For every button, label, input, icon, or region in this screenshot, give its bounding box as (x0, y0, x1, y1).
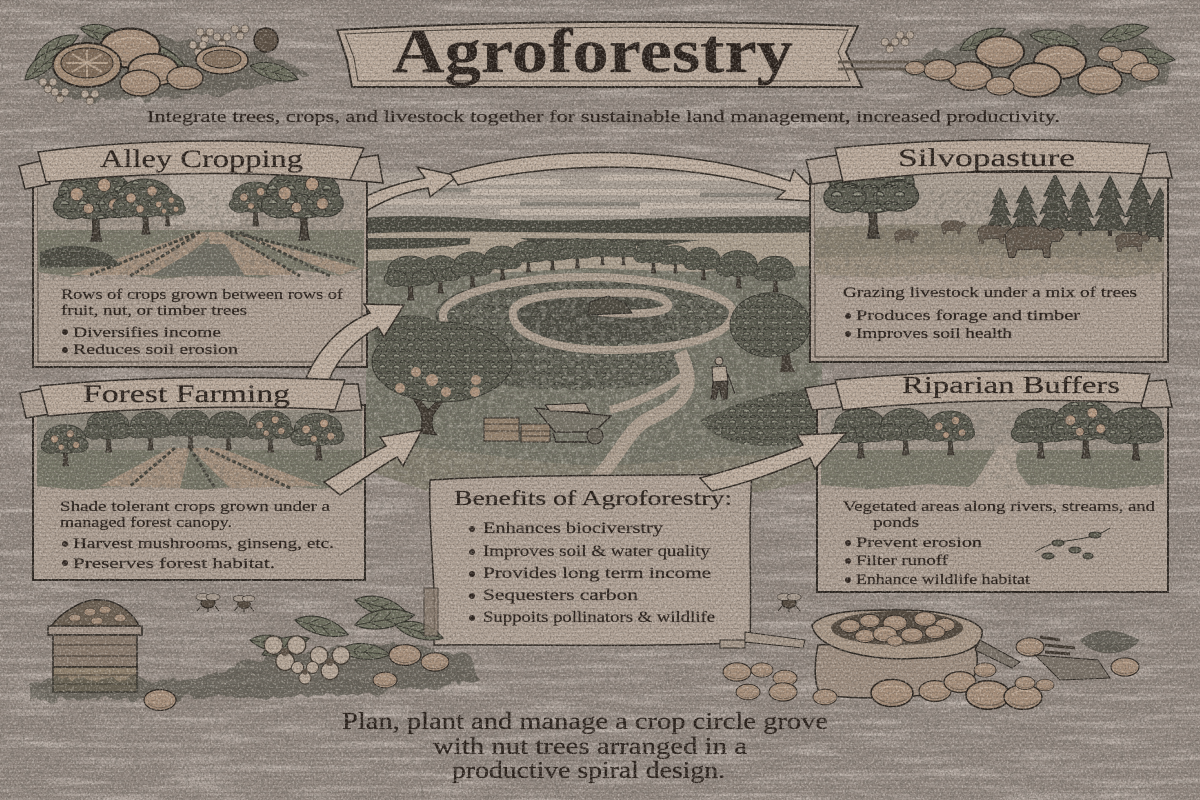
silvopasture text: Grazing livestock under a mix of trees (843, 285, 1137, 301)
small plant sketch (1035, 528, 1110, 559)
arrow: alley cropping panel to grove (306, 304, 404, 380)
banner: riparian buffers (805, 371, 1172, 410)
forest farming text: Shade tolerant crops grown under a (60, 499, 330, 515)
alley cropping scene (38, 168, 364, 280)
right tree (730, 293, 810, 372)
silvopasture scene (815, 175, 1164, 280)
icon: beehive (48, 600, 142, 692)
alley cropping text: fruit, nut, or timber trees (61, 303, 247, 319)
closing message: productive spiral design. (452, 758, 725, 784)
subtitle: Integrate trees, crops, and livestock together for sustainable land management, increased productivity. (147, 107, 1060, 126)
riparian text: Filter runoff (856, 553, 948, 569)
forest farming scene (37, 410, 362, 490)
decoration: sack of nuts (812, 610, 982, 707)
silvopasture text: Improves soil health (856, 326, 1013, 342)
alley cropping text: Rows of crops grown between rows of (61, 287, 343, 303)
title text: Agroforestry (392, 18, 793, 86)
crates (484, 418, 550, 442)
decoration: top-right nuts and leaves (838, 21, 1176, 97)
benefits list: Suppoits pollinators & wildlife (483, 609, 715, 626)
spiral path (443, 277, 733, 490)
panel: riparian buffers (817, 400, 1168, 592)
alley cropping text (61, 287, 343, 358)
riparian scene (821, 400, 1164, 490)
panel: alley cropping (33, 168, 367, 367)
banner: forest farming: Forest Farming (83, 381, 291, 408)
benefits list: Provides long term income (483, 565, 711, 582)
arrow: forest farming to grove (324, 430, 422, 495)
foliage mottling (360, 270, 830, 500)
benefits list: Improves soil & water quality (483, 543, 710, 560)
closing message: with nut trees arranged in a (433, 734, 747, 760)
banner: alley cropping (19, 141, 383, 189)
riparian text: Prevent erosion (856, 535, 983, 551)
banner: silvopasture (806, 140, 1172, 184)
decoration: flowers and leaves (30, 589, 480, 710)
closing message (342, 709, 828, 784)
benefits list (469, 520, 715, 626)
closing message: Plan, plant and manage a crop circle grove (342, 709, 828, 735)
benefits list: Enhances biociverstry (483, 520, 663, 537)
large fruit tree (372, 315, 512, 435)
benefits heading: Benefits of Agroforestry: (454, 486, 732, 510)
panel: forest farming (33, 405, 365, 580)
banner: alley cropping: Alley Cropping (100, 146, 304, 173)
banner: silvopasture: Silvopasture (898, 145, 1075, 172)
forest farming text: Preserves forest habitat. (73, 556, 275, 572)
alley cropping text: Reduces soil erosion (73, 342, 239, 358)
decoration: nuts, wood and stones (424, 588, 1140, 709)
riparian text: ponds (873, 515, 919, 531)
panel: silvopasture (810, 156, 1175, 362)
forest farming text: Harvest mushrooms, ginseng, etc. (73, 536, 334, 552)
banner: forest farming (20, 378, 362, 418)
icons: bees (196, 594, 801, 612)
benefits list: Sequesters carbon (483, 587, 638, 604)
central illustration: spiral grove (360, 168, 830, 500)
panel: benefits scroll (430, 474, 752, 645)
forest farming text: managed forest canopy. (60, 515, 232, 531)
decoration: top-left nuts and leaves (19, 18, 310, 105)
title banner (337, 18, 862, 87)
row of orchard trees (384, 238, 795, 300)
riparian text (843, 499, 1156, 588)
riparian text: Vegetated areas along rivers, streams, and (843, 499, 1156, 515)
riparian text: Enhance wildlife habitat (856, 572, 1031, 588)
farmer figure (711, 357, 735, 399)
alley cropping text: Diversifies income (73, 325, 221, 341)
silvopasture text (843, 285, 1137, 342)
arrow: across top to silvopasture (450, 153, 826, 202)
arrow: grove to riparian buffers (700, 433, 846, 491)
banner: riparian buffers: Riparian Buffers (902, 373, 1120, 399)
wheelbarrow (535, 403, 611, 444)
silvopasture text: Produces forage and timber (856, 308, 1080, 324)
arrow: alley cropping to centre (350, 167, 458, 217)
forest farming text (60, 499, 334, 572)
